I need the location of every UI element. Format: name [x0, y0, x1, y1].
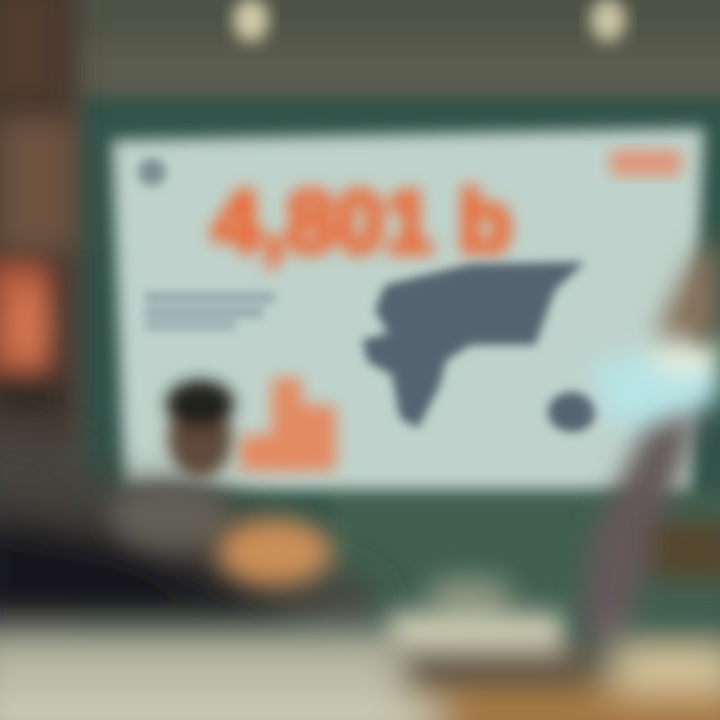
stack of papers on table — [390, 576, 580, 675]
presenter torso — [110, 480, 230, 550]
ceiling light left — [233, 0, 269, 42]
screen panel — [112, 128, 704, 490]
background: upper wall — [0, 0, 720, 110]
orange bar chart — [240, 378, 336, 472]
bookshelf on left — [0, 0, 78, 450]
background: teal wall band — [80, 98, 720, 638]
presenter head — [166, 380, 234, 478]
laptop silhouette right — [578, 410, 720, 650]
text block lines — [145, 293, 275, 329]
world map — [362, 262, 596, 432]
projection screen — [112, 128, 704, 490]
orange headline number: 4,801 b — [212, 172, 512, 271]
presenter body and dark foreground — [0, 420, 380, 630]
laptop glow at right — [590, 335, 720, 435]
ceiling light right — [590, 0, 626, 42]
screen logo icon — [138, 158, 166, 186]
top right orange badge — [610, 150, 682, 176]
plant or lamp at right edge — [655, 240, 720, 340]
presenter hand — [217, 518, 333, 586]
foreground table — [0, 632, 720, 720]
